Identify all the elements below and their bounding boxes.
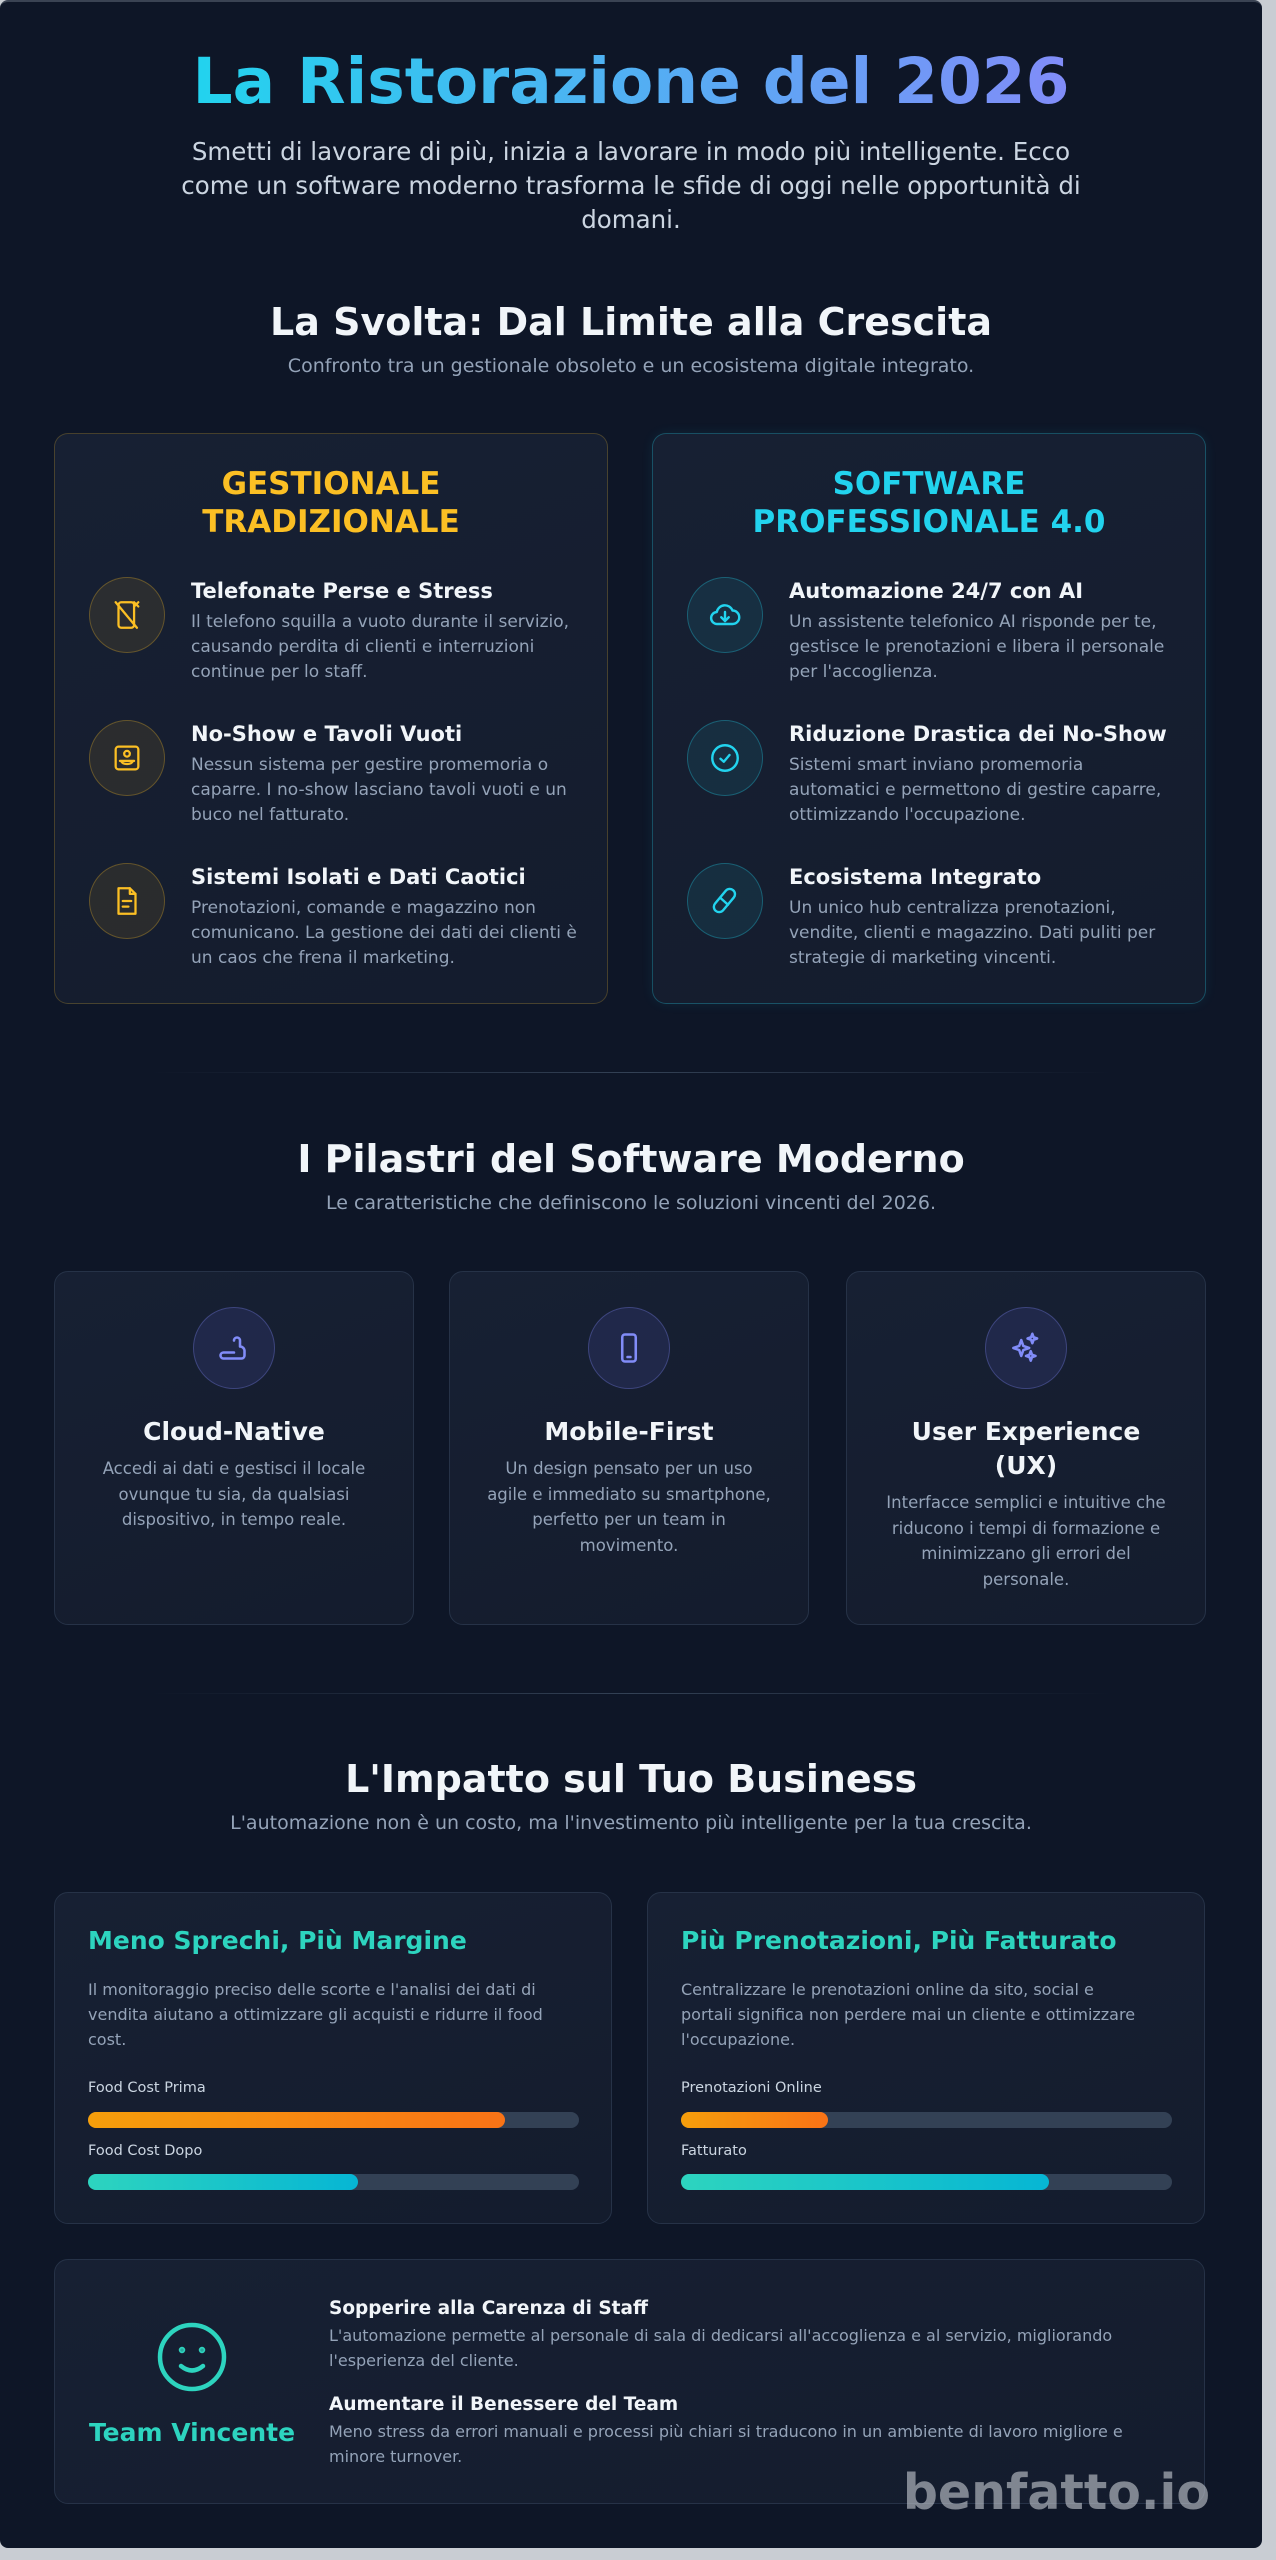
icon: check circle xyxy=(687,720,763,796)
panel: meno sprechi: Food Cost Prima xyxy=(88,2080,206,2096)
text: cloud-native xyxy=(102,1417,365,1529)
panel: meno sprechi: vendita aiutano a ottimizzare gli acquisti e ridurre il food xyxy=(88,2005,543,2024)
bar chart: prenotazioni online xyxy=(681,2112,1172,2128)
subheading: pilastri: Le caratteristiche che definiscono le soluzioni vincenti del 2026. xyxy=(326,1192,936,1214)
icon: cloud xyxy=(193,1307,275,1389)
subtitle: Smetti di lavorare di più, inizia a lavorare in modo più intelligente. Ecco come un software moderno trasforma le sfide di oggi nelle opportunità di domani. xyxy=(181,137,1081,234)
panel: gestionale tradizionale xyxy=(54,433,608,1004)
icon: smiley xyxy=(158,2322,226,2392)
item: no-show: No-Show e Tavoli Vuoti xyxy=(191,722,462,746)
item: ecosistema xyxy=(687,863,1156,968)
panel title: software professionale: SOFTWARE xyxy=(833,466,1025,502)
icon: empty table xyxy=(89,720,165,796)
item: sistemi isolati: Sistemi Isolati e Dati Caotici xyxy=(191,865,526,889)
item: telefonate perse: Il telefono squilla a vuoto durante il servizio, causando perdita di clienti e interruzioni continue per lo staff. xyxy=(191,612,569,682)
icon: sparkles xyxy=(985,1307,1067,1389)
panel: team vincente xyxy=(54,2259,1205,2504)
panel: user experience xyxy=(846,1271,1206,1625)
icon: document xyxy=(89,863,165,939)
heading: impatto: L'Impatto sul Tuo Business xyxy=(345,1757,917,1801)
bar chart: fatturato xyxy=(681,2174,1172,2190)
item: no-show xyxy=(89,720,567,825)
item: no-show: Nessun sistema per gestire promemoria o caparre. I no-show lasciano tavoli vuoti e un buco nel fatturato. xyxy=(191,755,567,825)
icon: link xyxy=(687,863,763,939)
watermark: benfatto.io: benfatto.io xyxy=(903,2464,1210,2521)
panel: più prenotazioni: portali significa non perdere mai un cliente e ottimizzare xyxy=(681,2005,1135,2024)
subheading: impatto: L'automazione non è un costo, ma l'investimento più intelligente per la tua crescita. xyxy=(230,1812,1032,1834)
panel: più prenotazioni: Più Prenotazioni, Più Fatturato xyxy=(681,1926,1117,1955)
item: telefonate perse: Telefonate Perse e Stress xyxy=(191,579,493,603)
subheading: la svolta: Confronto tra un gestionale obsoleto e un ecosistema digitale integrato. xyxy=(288,355,974,377)
heading: la svolta: La Svolta: Dal Limite alla Crescita xyxy=(270,300,992,344)
text block: staff: Aumentare il Benessere del Team xyxy=(329,2394,678,2415)
bar chart: food cost dopo xyxy=(88,2174,579,2190)
text: cloud-native: Accedi ai dati e gestisci il locale ovunque tu sia, da qualsiasi dispositivo, in tempo reale. xyxy=(103,1459,365,1529)
panel: mobile-first xyxy=(449,1271,809,1625)
panel title: software professionale xyxy=(752,466,1106,540)
item: ecosistema: Un unico hub centralizza prenotazioni, vendite, clienti e magazzino. Dati puliti per strategie di marketing vincenti. xyxy=(789,898,1155,968)
text block: staff: Meno stress da errori manuali e processi più chiari si traducono in un ambiente di lavoro migliore e minore turnover. xyxy=(329,2422,1123,2466)
icon: cloud download xyxy=(687,577,763,653)
item: sistemi isolati xyxy=(89,863,577,968)
item: riduzione no-show: Riduzione Drastica dei No-Show xyxy=(789,722,1167,746)
bar chart: food cost prima xyxy=(88,2112,579,2128)
panel: cloud-native xyxy=(54,1271,414,1625)
panel: meno sprechi: Meno Sprechi, Più Margine xyxy=(88,1926,467,1955)
item: riduzione no-show: Sistemi smart inviano promemoria automatici e permettono di gestire caparre, ottimizzando l'occupazione. xyxy=(789,755,1161,825)
panel title: gestionale tradizionale: TRADIZIONALE xyxy=(202,504,460,540)
icon: smartphone xyxy=(588,1307,670,1389)
panel: più prenotazioni: Centralizzare le prenotazioni online da sito, social e xyxy=(681,1980,1094,1999)
text: user experience xyxy=(886,1417,1166,1588)
title: La Ristorazione del 2026 xyxy=(193,45,1069,118)
panel: più prenotazioni: Fatturato xyxy=(681,2143,747,2159)
label: team vincente: Team Vincente xyxy=(89,2418,295,2447)
item: automazione: Un assistente telefonico AI risponde per te, gestisce le prenotazioni e libera il personale per l'accoglienza. xyxy=(789,612,1164,682)
text block: staff xyxy=(329,2298,1123,2466)
item: automazione xyxy=(687,577,1164,682)
item: sistemi isolati: Prenotazioni, comande e magazzino non comunicano. La gestione dei dati dei clienti è un caos che frena il marketing. xyxy=(191,898,577,968)
panel: più prenotazioni xyxy=(647,1892,1205,2224)
text: user experience: User Experience (UX) xyxy=(912,1417,1140,1480)
panel title: gestionale tradizionale: GESTIONALE xyxy=(222,466,440,502)
item: telefonate perse xyxy=(89,577,569,682)
icon: phone off xyxy=(89,577,165,653)
panel: più prenotazioni: l'occupazione. xyxy=(681,2030,795,2049)
text block: staff: L'automazione permette al personale di sala di dedicarsi all'accoglienza e al servizio, migliorando l'esperienza del cliente. xyxy=(329,2326,1112,2370)
text: user experience: Interfacce semplici e intuitive che riducono i tempi di formazione e minimizzano gli errori del personale. xyxy=(886,1493,1166,1588)
item: automazione: Automazione 24/7 con AI xyxy=(789,579,1083,603)
text block: staff: Sopperire alla Carenza di Staff xyxy=(329,2298,648,2319)
text: mobile-first: Mobile-First xyxy=(544,1417,714,1446)
panel: meno sprechi: Food Cost Dopo xyxy=(88,2143,202,2159)
heading: pilastri: I Pilastri del Software Moderno xyxy=(297,1137,965,1181)
text: mobile-first: Un design pensato per un uso agile e immediato su smartphone, perfetto per un team in movimento. xyxy=(487,1459,771,1554)
panel title: software professionale: PROFESSIONALE 4.0 xyxy=(752,504,1106,540)
panel: software professionale 4.0 xyxy=(652,433,1206,1004)
item: ecosistema: Ecosistema Integrato xyxy=(789,865,1041,889)
panel: meno sprechi xyxy=(54,1892,612,2224)
panel title: gestionale tradizionale xyxy=(202,466,460,540)
item: riduzione no-show xyxy=(687,720,1167,825)
panel: meno sprechi: Il monitoraggio preciso delle scorte e l'analisi dei dati di xyxy=(88,1980,536,1999)
panel: meno sprechi: cost. xyxy=(88,2030,126,2049)
text: mobile-first xyxy=(487,1417,771,1554)
panel: più prenotazioni: Prenotazioni Online xyxy=(681,2080,822,2096)
text: cloud-native: Cloud-Native xyxy=(143,1417,325,1446)
